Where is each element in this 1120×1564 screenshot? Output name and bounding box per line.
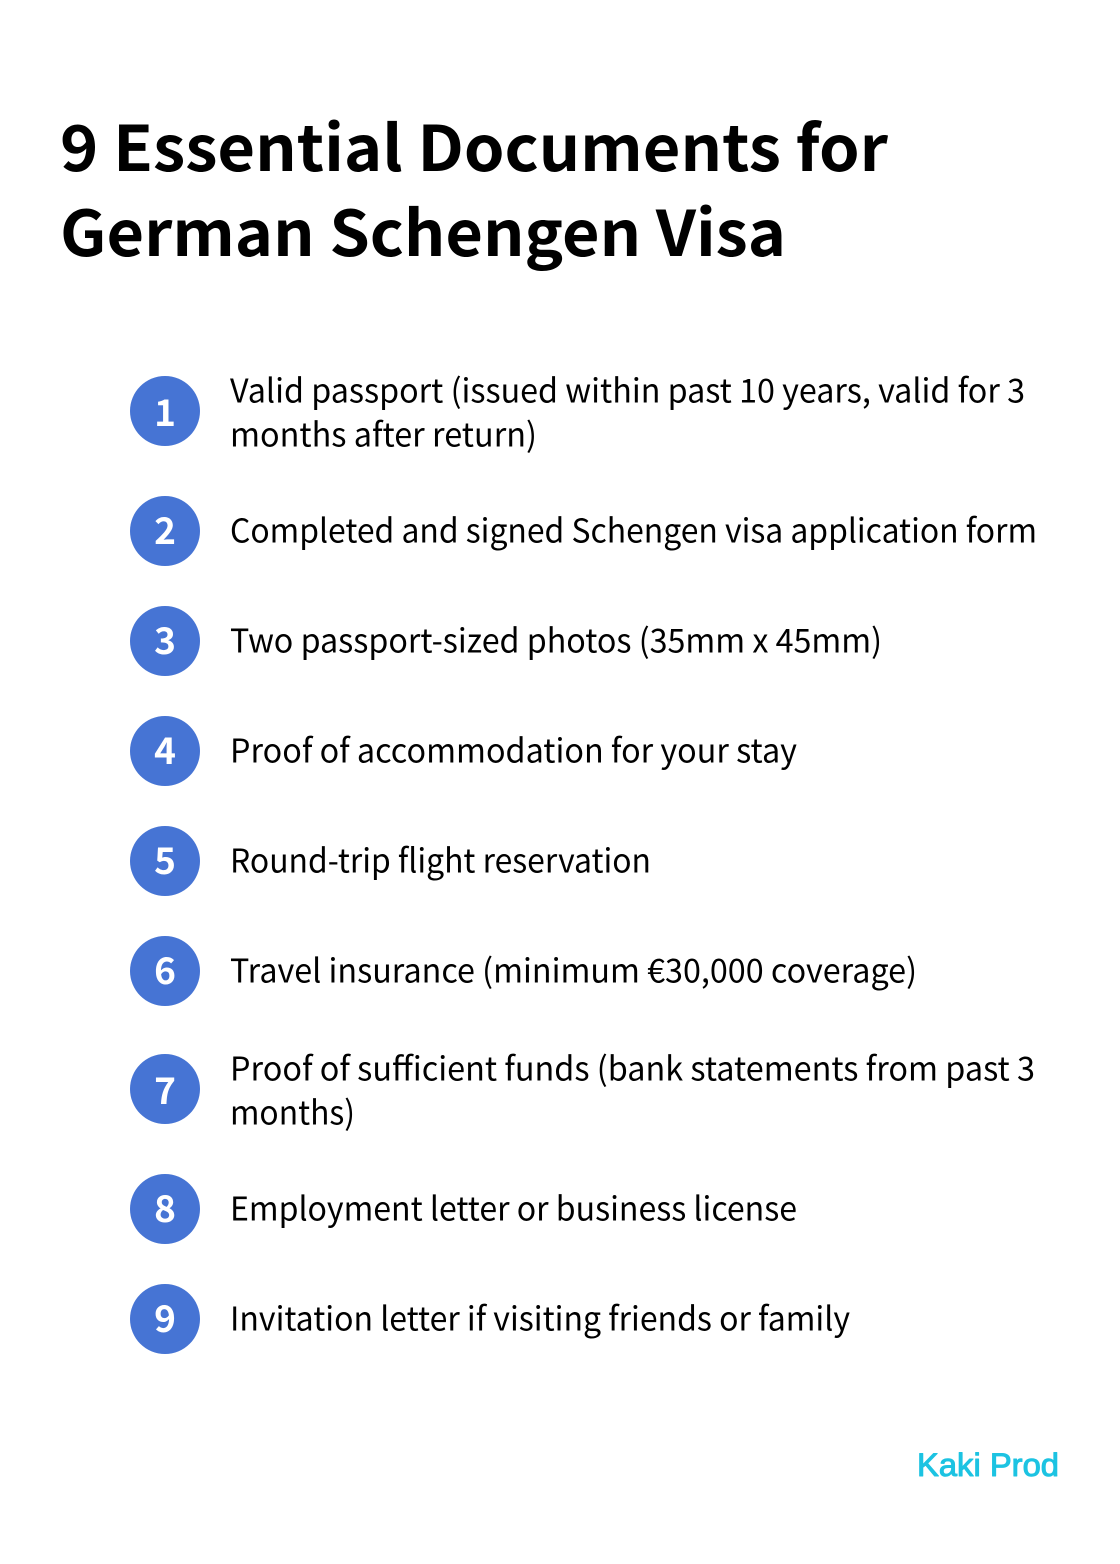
list item 1: valid passport: 1: [154, 383, 176, 437]
list item 7: sufficient funds: months): [230, 1086, 355, 1134]
list item 9: invitation letter: [130, 1284, 850, 1354]
title: 9 Essential Documents for: [60, 99, 889, 190]
list item 5: flight reservation: 5: [154, 831, 176, 885]
list item 9: invitation letter: Invitation letter if visiting friends or family: [230, 1292, 850, 1340]
list item 2: application form: Completed and signed Schengen visa application form: [230, 504, 1037, 552]
list item 4: accommodation: Proof of accommodation for your stay: [230, 724, 797, 772]
list item 2: application form: 2: [154, 501, 176, 555]
title: [60, 99, 889, 275]
list item 3: photos: 3: [154, 611, 176, 665]
list item 3: photos: [130, 606, 882, 676]
list item 6: travel insurance: 6: [154, 941, 176, 995]
list item 7: sufficient funds: [130, 1042, 1035, 1134]
list item 4: accommodation: 4: [154, 721, 176, 775]
list item 8: employment letter: Employment letter or business license: [230, 1182, 797, 1230]
list item 7: sufficient funds: Proof of sufficient funds (bank statements from past 3: [230, 1042, 1035, 1090]
list item 5: flight reservation: [130, 826, 651, 896]
list item 5: flight reservation: Round-trip flight reservation: [230, 834, 651, 882]
list item 8: employment letter: 8: [154, 1179, 176, 1233]
list item 8: employment letter: [130, 1174, 797, 1244]
list item 9: invitation letter: 9: [154, 1289, 176, 1343]
list item 2: application form: [130, 496, 1037, 566]
list item 3: photos: Two passport-sized photos (35mm x 45mm): [230, 614, 882, 662]
list item 6: travel insurance: Travel insurance (minimum €30,000 coverage): [230, 944, 917, 992]
list item 6: travel insurance: [130, 936, 917, 1006]
title: German Schengen Visa: [60, 184, 786, 275]
brand logo: Kaki Prod: [917, 1447, 1059, 1483]
list item 1: valid passport: Valid passport (issued within past 10 years, valid for 3: [230, 364, 1025, 412]
list item 4: accommodation: [130, 716, 797, 786]
list item 7: sufficient funds: 7: [154, 1061, 176, 1115]
list item 1: valid passport: [130, 364, 1025, 456]
list item 1: valid passport: months after return): [230, 408, 537, 456]
